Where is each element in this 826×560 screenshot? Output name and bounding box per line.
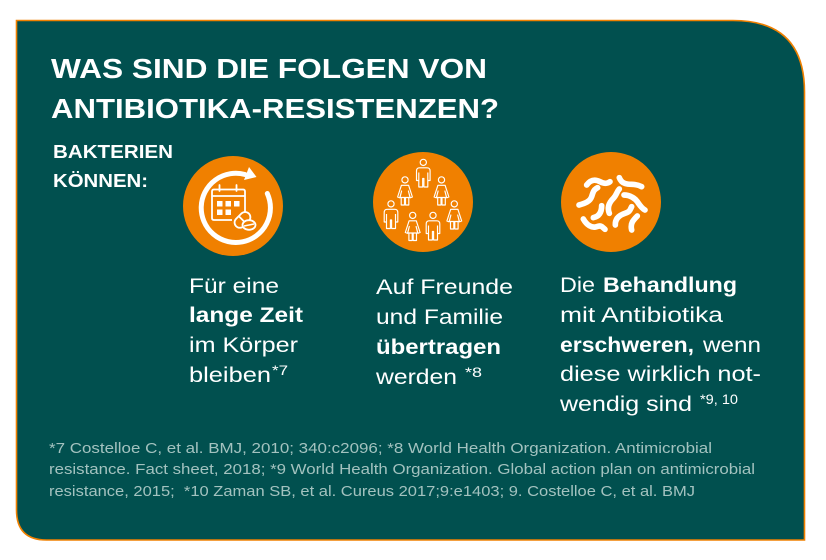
footnotes [49, 441, 755, 500]
text block: complicate treatment: Die [560, 274, 595, 297]
text block: complicate treatment: wenn [702, 334, 761, 357]
text block: complicate treatment: Behandlung [603, 274, 737, 297]
text block: complicate treatment: erschweren, [560, 334, 694, 357]
subheading: BAKTERIEN [53, 142, 173, 162]
text block: long time in the body: lange Zeit [189, 304, 303, 327]
text block: complicate treatment: diese wirklich not- [560, 363, 761, 386]
text block: long time in the body: *7 [272, 362, 288, 378]
text block: transmit to friends and family: übertragen [376, 336, 501, 359]
icon: bacteria [561, 152, 661, 252]
text block: complicate treatment [559, 274, 761, 416]
text block: transmit to friends and family: werden [375, 366, 457, 389]
text block: long time in the body: Für eine [189, 275, 279, 298]
icon: group of people [373, 152, 473, 252]
text block: long time in the body [189, 275, 303, 387]
subheading: KÖNNEN: [53, 171, 148, 191]
title: WAS SIND DIE FOLGEN VON [51, 53, 487, 84]
text block: long time in the body: bleiben [189, 364, 271, 387]
icon: calendar with circular arrow and pills [183, 156, 283, 256]
footnotes: resistance, 2015; *10 Zaman SB, et al. Cureus 2017;9:e1403; 9. Costelloe C, et al. BMJ [49, 484, 695, 500]
title: ANTIBIOTIKA-RESISTENZEN? [51, 93, 499, 124]
subheading [53, 142, 173, 191]
text block: complicate treatment: mit Antibiotika [560, 304, 723, 327]
footnotes: resistance. Fact sheet, 2018; *9 World Health Organization. Global action plan on antimicrobial [49, 462, 755, 478]
text block: complicate treatment: *9, 10 [700, 391, 738, 407]
text block: complicate treatment: wendig sind [559, 393, 692, 416]
text block: transmit to friends and family: und Familie [376, 306, 503, 329]
title [51, 53, 499, 124]
footnotes: *7 Costelloe C, et al. BMJ, 2010; 340:c2096; *8 World Health Organization. Antimicrobial [49, 441, 712, 457]
text block: transmit to friends and family: Auf Freunde [376, 276, 513, 299]
text block: transmit to friends and family: *8 [465, 364, 482, 380]
text block: transmit to friends and family [375, 276, 513, 389]
text block: long time in the body: im Körper [189, 334, 298, 357]
